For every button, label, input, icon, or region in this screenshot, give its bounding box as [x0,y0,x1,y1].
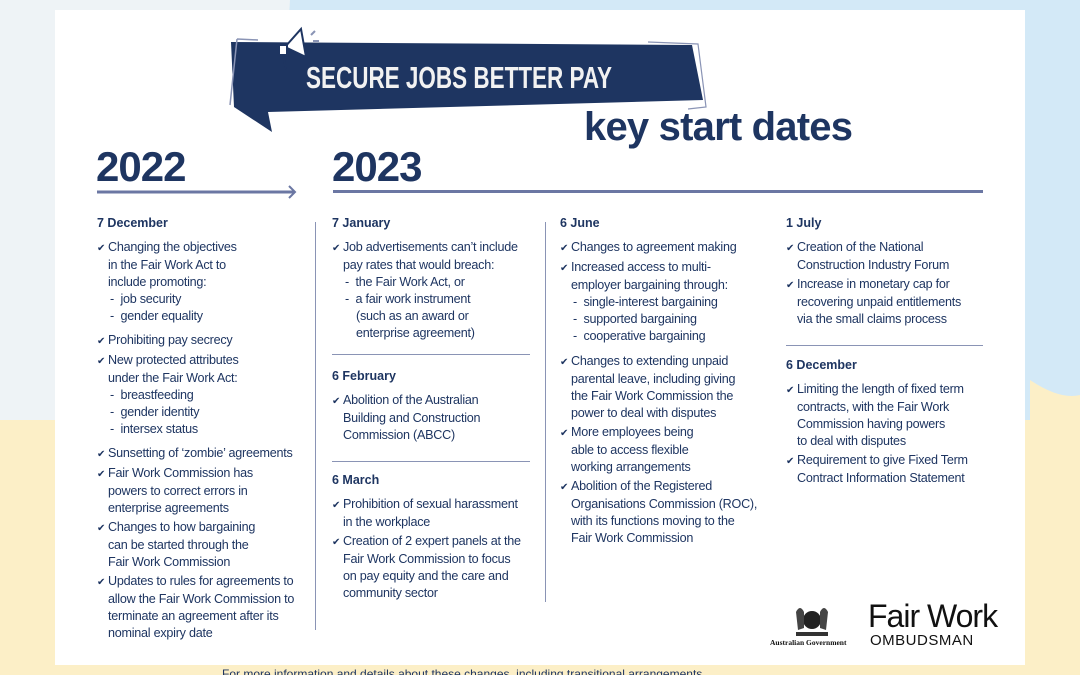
column 2023 b: ✔ [560,263,568,274]
column 2022: ✔ [97,243,105,254]
logo: Fair Work Ombudsman: OMBUDSMAN [870,632,974,649]
logo: Fair Work Ombudsman: Fair Work [868,598,997,634]
column 2022: Changes to how bargaining [108,520,255,534]
title banner [229,26,707,132]
column 2023 b: 6 June [560,216,600,230]
column 2023 a: - the Fair Work Act, or [345,275,465,289]
column 2023 c: 1 July [786,216,821,230]
column 2023 a: Creation of 2 expert panels at the [343,534,521,548]
column 2023 b: ✔ [560,428,568,439]
column 2023 c: recovering unpaid entitlements [797,295,961,309]
column 2023 b: Increased access to multi- [571,260,711,274]
column 2022: Fair Work Commission has [108,466,253,480]
column 2023 a: in the workplace [343,515,430,529]
column 2023 a: 6 February [332,369,396,383]
column 2023 c: contracts, with the Fair Work [797,400,949,414]
column 2023 b: Changes to extending unpaid [571,354,728,368]
column 2022: ✔ [97,449,105,460]
column 2023 c: Increase in monetary cap for [797,277,950,291]
column 2023 b: ✔ [560,482,568,493]
column 2023 b: able to access flexible [571,443,688,457]
column 2023 b: Abolition of the Registered [571,479,712,493]
year 2023: 2023 [332,143,421,190]
icon: megaphone [279,29,319,69]
subtitle: key start dates [584,105,852,149]
column 2022: enterprise agreements [108,501,229,515]
column 2022: ✔ [97,336,105,347]
column 2022: can be started through the [108,538,249,552]
column 2023 c: Creation of the National [797,240,923,254]
column 2023 b: - supported bargaining [573,312,697,326]
column 2022: - job security [110,292,181,306]
column 2023 c: ✔ [786,456,794,467]
column 2023 a: (such as an award or [356,309,469,323]
column 2023 b: - single-interest bargaining [573,295,718,309]
column 2023 a: ✔ [332,537,340,548]
column 2023 c: to deal with disputes [797,434,906,448]
column 2023 a: ✔ [332,396,340,407]
column 2022: 7 December [97,216,168,230]
column 2023 b: employer bargaining through: [571,278,728,292]
column 2023 b: working arrangements [571,460,691,474]
column 2022: - gender identity [110,405,199,419]
year 2022: 2022 [96,143,185,190]
column 2023 c: ✔ [786,243,794,254]
column 2022: in the Fair Work Act to [108,258,226,272]
column 2023 c: Limiting the length of fixed term [797,382,964,396]
column 2023 a: Abolition of the Australian [343,393,478,407]
logo: Fair Work Ombudsman [770,598,998,649]
column 2023 a: - a fair work instrument [345,292,470,306]
column 2022: Updates to rules for agreements to [108,574,293,588]
column 2023 a: pay rates that would breach: [343,258,494,272]
column 2022: Changing the objectives [108,240,237,254]
column 2023 c: ✔ [786,385,794,396]
column 2022: under the Fair Work Act: [108,371,238,385]
column 2022: - gender equality [110,309,203,323]
column 2022: nominal expiry date [108,626,212,640]
column 2023 c: Requirement to give Fixed Term [797,453,968,467]
column 2023 b: - cooperative bargaining [573,329,705,343]
column 2022: ✔ [97,356,105,367]
column 2023 b: Changes to agreement making [571,240,736,254]
column 2022: - intersex status [110,422,198,436]
column 2023 a: Prohibition of sexual harassment [343,497,518,511]
column 2022: Fair Work Commission [108,555,230,569]
column 2023 a: ✔ [332,243,340,254]
column 2023 c: 6 December [786,358,857,372]
column 2022: include promoting: [108,275,206,289]
column 2023 b: Fair Work Commission [571,531,693,545]
column 2023 b: with its functions moving to the [571,514,734,528]
column 2023 a: Building and Construction [343,411,480,425]
column 2023 a: Commission (ABCC) [343,428,455,442]
column 2023 b: Organisations Commission (ROC), [571,497,757,511]
column 2023 c: Contract Information Statement [797,471,964,485]
column 2023 b: More employees being [571,425,693,439]
column 2022: ✔ [97,577,105,588]
column 2022: allow the Fair Work Commission to [108,592,294,606]
column 2023 a: ✔ [332,500,340,511]
column 2023 b: the Fair Work Commission the [571,389,733,403]
column 2023 b [560,216,757,545]
column 2023 b: parental leave, including giving [571,372,735,386]
column 2023 b: ✔ [560,357,568,368]
column 2023 a: enterprise agreement) [356,326,475,340]
column 2022: New protected attributes [108,353,239,367]
column 2023 c [786,216,983,485]
column 2023 a: 7 January [332,216,390,230]
column 2023 c: Construction Industry Forum [797,258,949,272]
column 2022 [97,216,294,640]
column 2022: terminate an agreement after its [108,609,279,623]
column 2023 a: community sector [343,586,438,600]
column 2023 c: ✔ [786,280,794,291]
icon: coat of arms [796,608,828,636]
column 2022: Sunsetting of ‘zombie’ agreements [108,446,292,460]
column 2022: Prohibiting pay secrecy [108,333,232,347]
column 2023 a [332,216,530,600]
column 2023 b: power to deal with disputes [571,406,716,420]
column 2023 a: on pay equity and the care and [343,569,508,583]
column 2023 b: ✔ [560,243,568,254]
column 2023 c: Commission having powers [797,417,945,431]
logo: Fair Work Ombudsman: Australian Government [770,638,846,647]
timeline line 2023 [333,190,983,193]
column 2022: powers to correct errors in [108,484,248,498]
column 2022: - breastfeeding [110,388,194,402]
column 2022: ✔ [97,523,105,534]
column 2023 a: Fair Work Commission to focus [343,552,510,566]
arrow 2022 [97,185,296,199]
column 2022: ✔ [97,469,105,480]
column 2023 c: via the small claims process [797,312,947,326]
column 2023 a: Job advertisements can’t include [343,240,518,254]
column 2023 a: 6 March [332,473,379,487]
